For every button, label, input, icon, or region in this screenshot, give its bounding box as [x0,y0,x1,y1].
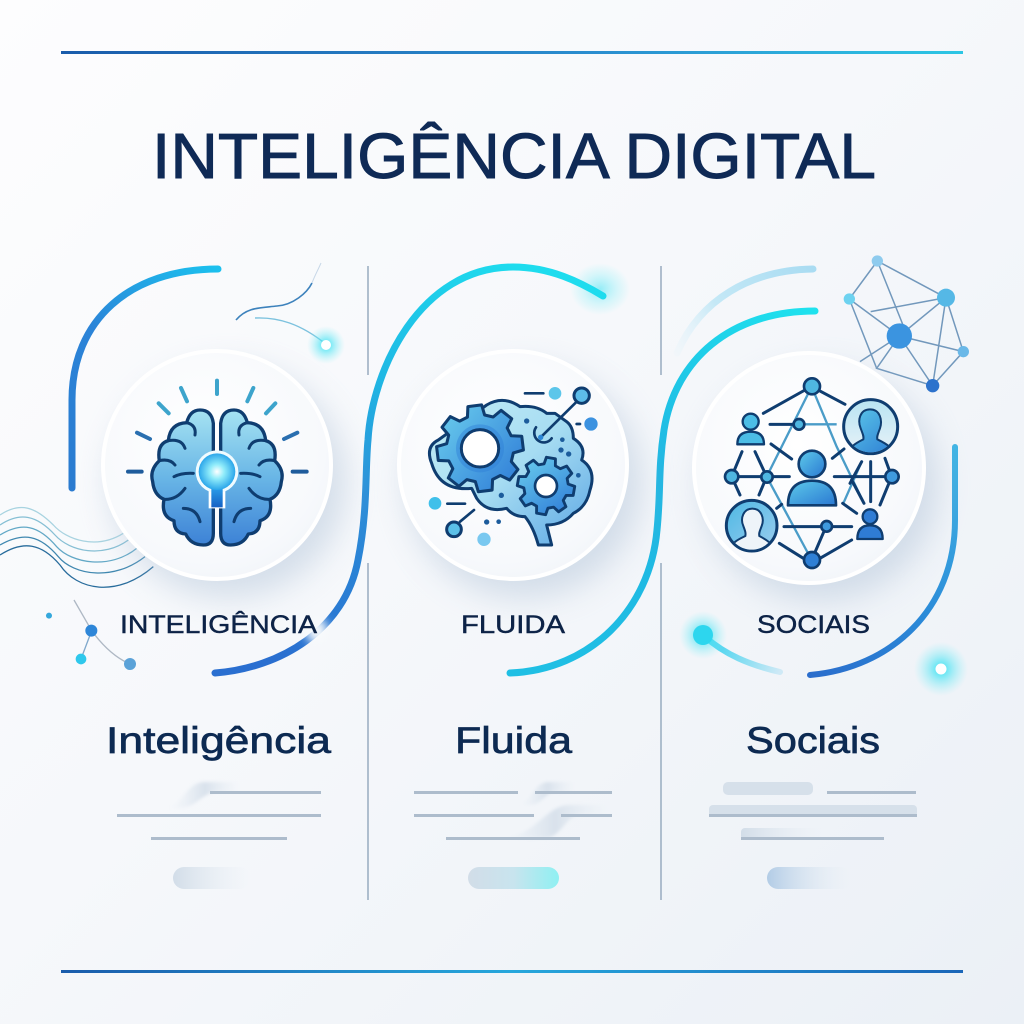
label: INTELIGÊNCIA [120,610,317,639]
avatar: circular bottom left [726,500,777,552]
text placeholder lines: Sociais [709,782,917,889]
avatar: lower right person [857,509,883,539]
label: FLUIDA [461,611,565,639]
disc shadow [406,366,642,598]
label: SOCIAIS [757,611,870,639]
text placeholder lines: Inteligência [117,782,321,889]
icon: brain with gears [429,387,598,546]
heading: Fluida: Fluida [455,720,572,761]
avatar: circular top right [844,400,898,458]
disc shadow [702,369,938,601]
flowing wave lines [0,507,153,587]
pill [468,867,559,889]
text placeholder lines: Fluida [414,782,612,889]
top rule [61,51,963,54]
icon: social network of people [725,378,899,568]
small gear [513,453,579,519]
big gear [432,401,528,496]
heading: Inteligência: Inteligência [106,720,332,761]
disc [694,353,924,583]
title: INTELIGÊNCIA DIGITAL [152,120,876,192]
glow node and thin lines: top of column 1 [236,263,345,364]
panel: Inteligência [103,351,346,639]
disc [103,351,331,579]
column dividers [368,266,661,900]
disc shadow [110,366,346,598]
disc [399,351,627,579]
glow node: bottom right [914,642,968,696]
network graphic: top right [844,255,969,392]
bottom rule [61,970,963,973]
panel: Fluida [399,351,642,639]
avatar: top left person [737,414,764,444]
pill [173,867,251,889]
avatar: central person [788,451,836,505]
decorative arcs [72,263,955,675]
glow node: lower left of Sociais [679,611,727,659]
heading: Sociais: Sociais [746,720,880,761]
haze over arc behind label [306,618,328,644]
panel: Sociais [694,353,938,639]
small network: lower left [46,600,136,670]
icon: brain with glowing core [128,381,307,545]
pill [767,867,853,889]
